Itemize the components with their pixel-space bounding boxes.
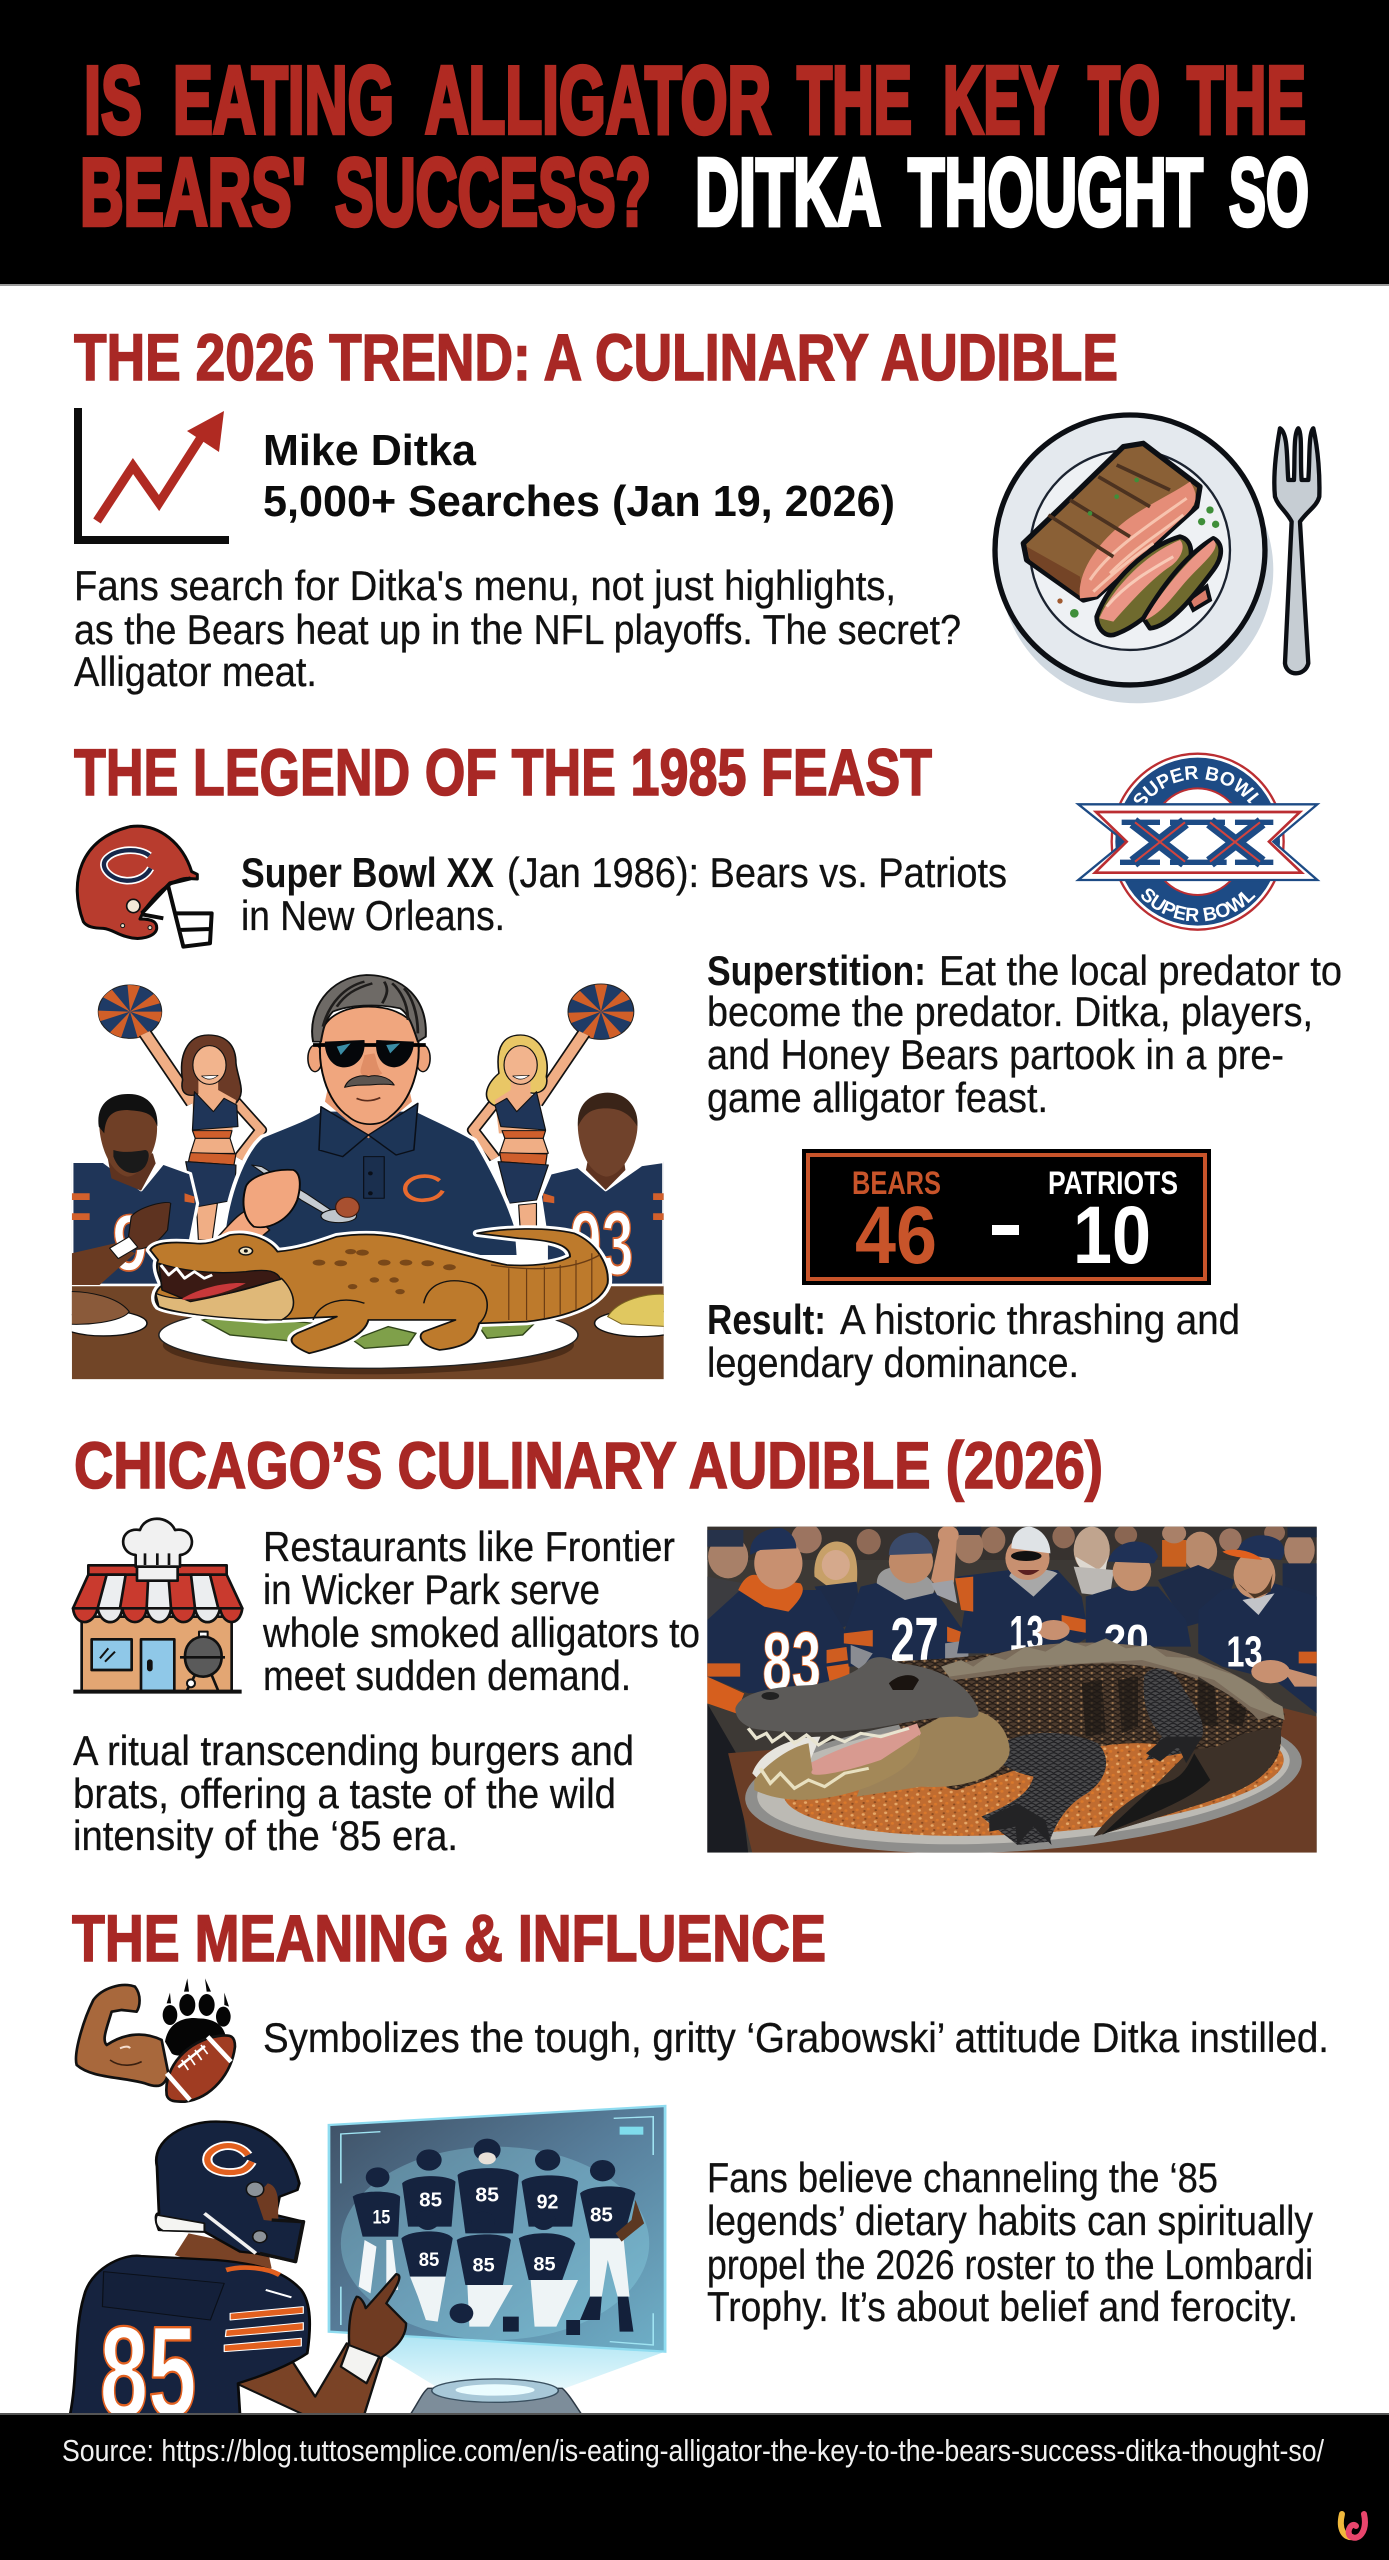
text: restaurants bbox=[262, 1523, 700, 1699]
panel: meaning and influence bbox=[70, 1901, 1329, 2445]
illustration: player viewing hologram of 1985 legends bbox=[70, 2106, 665, 2445]
scoreboard: Bears 46 Patriots 10 bbox=[802, 1149, 1211, 1285]
heading: meaning and influence: THE MEANING & INFLUENCE bbox=[72, 1901, 826, 1975]
hologram screen bbox=[329, 2106, 665, 2352]
heading: the 2026 trend: THE 2026 TREND: A CULINARY AUDIBLE bbox=[74, 320, 1118, 394]
cheerleader left bbox=[145, 1033, 261, 1240]
crowd background bbox=[707, 1523, 1317, 1630]
text: fans believe bbox=[707, 2154, 1313, 2330]
stat: Mike Ditka: Mike Ditka bbox=[263, 426, 477, 475]
table bbox=[707, 1703, 748, 1853]
title line 2 white bbox=[695, 139, 1309, 246]
icon: Super Bowl XX logo: SUPER BOWL bbox=[1134, 766, 1259, 804]
heading: legend of 1985 feast: THE LEGEND OF THE 1985 FEAST bbox=[74, 735, 932, 809]
icon: Super Bowl XX logo bbox=[1075, 752, 1320, 931]
header banner bbox=[0, 0, 1389, 286]
title line 2 white: DITKA bbox=[695, 139, 881, 246]
title line 1: EATING bbox=[173, 47, 394, 154]
fan 13 right bbox=[1198, 1535, 1317, 1713]
team back row: 85 bbox=[419, 2188, 442, 2211]
text: restaurants: Restaurants like Frontier bbox=[263, 1523, 675, 1570]
title line 2 white: THOUGHT bbox=[908, 139, 1203, 246]
text: result: A historic thrashing and bbox=[840, 1296, 1240, 1343]
body text: trend: as the Bears heat up in the NFL playoffs. The secret? bbox=[74, 606, 961, 653]
text: Super Bowl XX: in New Orleans. bbox=[241, 892, 505, 939]
text: Super Bowl XX: (Jan 1986): Bears vs. Patriots bbox=[507, 849, 1007, 896]
fan 13 centre with raised fist bbox=[931, 1526, 1089, 1661]
fan 13 right: 13 bbox=[1226, 1629, 1263, 1677]
fan 13 centre with raised fist: 13 bbox=[1009, 1606, 1044, 1661]
title line 1: THE bbox=[1187, 47, 1306, 154]
title line 2 red bbox=[80, 139, 651, 246]
team back row: 15 bbox=[372, 2207, 390, 2228]
player in jersey 85 with helmet: 85 bbox=[100, 2300, 197, 2445]
fan 27: 27 bbox=[890, 1605, 939, 1675]
icon: restaurant storefront with chef hat and grill bbox=[73, 1519, 242, 1692]
icon: plate of alligator meat and fork bbox=[995, 415, 1319, 703]
cartoon alligator bbox=[150, 1229, 608, 1353]
players and table: 9 bbox=[112, 1198, 148, 1287]
team back row: 92 bbox=[537, 2189, 558, 2213]
scoreboard: Bears 46 Patriots 10: BEARS bbox=[852, 1165, 941, 1201]
text: Super Bowl XX: Super Bowl XX bbox=[241, 849, 494, 896]
title line 1: THE bbox=[797, 47, 912, 154]
panel: legend of the 1985 feast bbox=[72, 735, 1342, 1386]
text: Super Bowl XX bbox=[241, 849, 1007, 939]
scoreboard: Bears 46 Patriots 10: 10 bbox=[1073, 1190, 1151, 1281]
team front row: 85 bbox=[473, 2255, 495, 2276]
text: superstition: become the predator. Ditka, players, bbox=[707, 988, 1313, 1035]
fan 20 bbox=[1086, 1542, 1191, 1647]
icon: Super Bowl XX logo: SUPER BOWL bbox=[1141, 888, 1256, 922]
text: ritual: A ritual transcending burgers and bbox=[73, 1727, 634, 1774]
fan 27 bbox=[844, 1533, 968, 1675]
photo: fans around whole smoked alligator bbox=[707, 1523, 1317, 1871]
illustration: Ditka feast with cheerleaders, players and alligator bbox=[60, 975, 688, 1379]
text: ritual: brats, offering a taste of the wild bbox=[73, 1770, 616, 1817]
title line 1: TO bbox=[1088, 47, 1160, 154]
scoreboard: Bears 46 Patriots 10: 46 bbox=[855, 1190, 937, 1281]
text: restaurants: in Wicker Park serve bbox=[263, 1566, 600, 1613]
fan 83 bbox=[707, 1528, 849, 1713]
team back row: 85 bbox=[590, 2203, 613, 2226]
title line 1 bbox=[84, 47, 1306, 154]
body text: trend bbox=[74, 562, 961, 695]
panel: 2026 trend bbox=[74, 320, 1319, 703]
team back row: 85 bbox=[475, 2183, 499, 2206]
text: result: Result: bbox=[707, 1296, 826, 1343]
icon: flexed arm, bear paw and football bbox=[76, 1978, 235, 2102]
text: restaurants: whole smoked alligators to bbox=[262, 1609, 700, 1656]
projector base bbox=[410, 2379, 582, 2415]
team front row bbox=[401, 2226, 580, 2335]
Ditka bbox=[218, 975, 519, 1257]
body text: trend: Alligator meat. bbox=[74, 648, 317, 695]
fan 83: 83 bbox=[762, 1614, 821, 1708]
title line 2 red: SUCCESS? bbox=[335, 139, 651, 246]
fan 20: 20 bbox=[1104, 1617, 1149, 1665]
text: result: legendary dominance. bbox=[707, 1339, 1079, 1386]
text: fans believe: Fans believe channeling the ‘85 bbox=[707, 2154, 1218, 2201]
text: ritual: intensity of the ‘85 era. bbox=[73, 1812, 458, 1859]
player arm and pointing hand bbox=[236, 2274, 406, 2420]
title line 1: ALLIGATOR bbox=[425, 47, 771, 154]
icon: red helmet bbox=[77, 826, 212, 947]
title line 2 red: BEARS' bbox=[80, 139, 306, 246]
realistic alligator bbox=[735, 1638, 1285, 1845]
title line 1: IS bbox=[84, 47, 142, 154]
serving plate and greens bbox=[158, 1317, 579, 1374]
text: superstition bbox=[707, 947, 1342, 1121]
team front row: 85 bbox=[533, 2254, 556, 2275]
team front row: 85 bbox=[419, 2250, 439, 2271]
stat: searches: 5,000+ Searches (Jan 19, 2026) bbox=[263, 477, 895, 526]
title line 2 white: SO bbox=[1229, 139, 1309, 246]
projector beam bbox=[386, 2337, 662, 2388]
text: superstition: Eat the local predator to bbox=[939, 947, 1342, 994]
players and table bbox=[60, 1093, 688, 1379]
title line 1: KEY bbox=[943, 47, 1058, 154]
icon: rising trend chart bbox=[78, 408, 229, 540]
player in jersey 85 with helmet bbox=[70, 2122, 310, 2445]
steel platter bbox=[745, 1724, 1302, 1853]
text: result bbox=[707, 1296, 1240, 1386]
text: superstition: game alligator feast. bbox=[707, 1074, 1048, 1121]
text: restaurants: meet sudden demand. bbox=[263, 1652, 631, 1699]
scoreboard: Bears 46 Patriots 10: PATRIOTS bbox=[1048, 1165, 1178, 1201]
icon: brand mark bbox=[1341, 2514, 1365, 2538]
text: superstition: Superstition: bbox=[707, 947, 926, 994]
team back row bbox=[353, 2139, 644, 2332]
body text: trend: Fans search for Ditka's menu, not just highlights, bbox=[74, 562, 896, 609]
cheerleader right bbox=[473, 1033, 584, 1237]
text: fans believe: Trophy. It’s about belief and ferocity. bbox=[707, 2283, 1298, 2330]
text: ritual bbox=[73, 1727, 634, 1859]
text: superstition: and Honey Bears partook in a pre- bbox=[707, 1031, 1284, 1078]
panel: Chicago's culinary audible bbox=[73, 1428, 1317, 1871]
text: fans believe: legends’ dietary habits can spiritually bbox=[707, 2197, 1313, 2244]
footer bar bbox=[0, 2413, 1389, 2560]
heading: Chicago's culinary audible: CHICAGO’S CULINARY AUDIBLE (2026) bbox=[74, 1428, 1103, 1502]
players and table: 93 bbox=[570, 1194, 633, 1294]
pom-poms bbox=[98, 984, 634, 1039]
